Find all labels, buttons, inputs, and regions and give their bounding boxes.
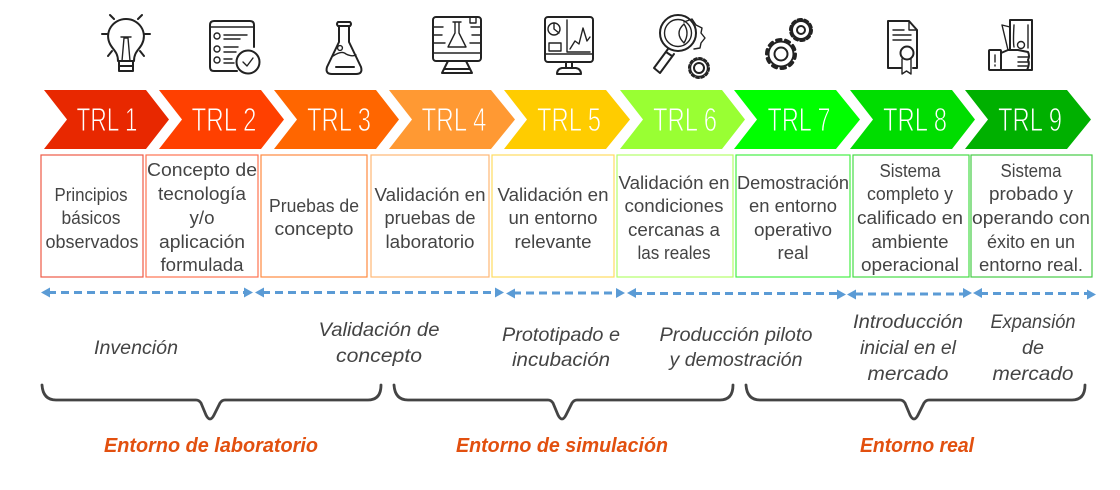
box: TRL 4 description: pruebas de (384, 208, 476, 228)
icon: gears (766, 20, 812, 68)
stage label: Introducción inicial en el mercado (853, 311, 963, 385)
box: TRL 8 description: completo y (867, 184, 953, 204)
chevron: TRL 6 (620, 90, 745, 149)
box: TRL 2 description: tecnología (158, 184, 247, 204)
icon: hand with money (989, 20, 1032, 70)
chevron: TRL 9: TRL 9 (998, 101, 1062, 138)
icon: lab monitor (433, 17, 481, 73)
chevron: TRL 7: TRL 7 (768, 101, 830, 138)
chevron: TRL 6: TRL 6 (653, 101, 717, 138)
arrow: Producción piloto range (627, 288, 846, 300)
box: TRL 8 description: Sistema (880, 161, 941, 181)
box: TRL 1 description: Principios (54, 185, 128, 205)
box: TRL 7 description: real (778, 243, 808, 263)
box: TRL 8 description: ambiente (872, 232, 948, 252)
box: TRL 6 description (617, 155, 733, 277)
box: TRL 7 description: operativo (754, 220, 832, 240)
chevron: TRL 2 (159, 90, 284, 149)
box: TRL 3 description: concepto (274, 219, 354, 239)
stage label: Expansión de mercado: de (1022, 337, 1044, 359)
box: TRL 5 description (492, 155, 614, 277)
stage label: Validación de concepto (318, 319, 440, 367)
icon: flask (327, 22, 361, 74)
stage label: Introducción inicial en el mercado: inicial en el (860, 337, 957, 359)
arrow: Introducción range (847, 288, 972, 300)
box: TRL 1 description: observados (46, 232, 138, 252)
stage label: Producción piloto y demostración (660, 324, 813, 371)
stage label: Prototipado e incubación: Prototipado e (502, 324, 620, 346)
stage label: Introducción inicial en el mercado: Introducción (853, 311, 963, 333)
stage label: Prototipado e incubación (502, 324, 620, 371)
arrow: Invención range (41, 288, 253, 298)
box: TRL 9 description: probado y (989, 184, 1073, 204)
stage label: Prototipado e incubación: incubación (512, 349, 610, 371)
box: TRL 7 description: en entorno (749, 196, 837, 216)
box: TRL 4 description: Validación en (374, 185, 486, 205)
box: TRL 9 description: entorno real. (979, 255, 1083, 275)
box: TRL 6 description: las reales (638, 243, 710, 263)
bracket: laboratorio (42, 385, 381, 419)
chevron: TRL 5 (504, 90, 630, 149)
chevron: TRL 8: TRL 8 (883, 101, 947, 138)
stage label: Producción piloto y demostración: y demostración (667, 349, 802, 371)
stage label: Expansión de mercado: mercado (992, 363, 1074, 385)
box: TRL 9 description (971, 155, 1092, 277)
box: TRL 2 description (146, 155, 258, 277)
stage label: Introducción inicial en el mercado: mercado (868, 363, 949, 385)
box: TRL 7 description (736, 155, 850, 277)
box: TRL 2 description: formulada (160, 255, 245, 275)
chevron: TRL 7 (734, 90, 860, 149)
icon: light bulb (102, 15, 150, 71)
box: TRL 5 description: relevante (514, 232, 592, 252)
box: TRL 9 description: operando con (972, 208, 1090, 228)
arrow: Prototipado range (506, 288, 625, 298)
box: TRL 5 description: un entorno (508, 208, 598, 228)
chevron: TRL 1 (44, 90, 169, 149)
icon: certificate (888, 21, 917, 74)
box: TRL 9 description: Sistema (1000, 161, 1062, 181)
box: TRL 6 description: Validación en (618, 173, 730, 193)
chevron: TRL 5: TRL 5 (537, 101, 601, 138)
box: TRL 2 description: aplicación (159, 232, 245, 252)
bracket: simulación (394, 385, 733, 419)
chevron: TRL 4: TRL 4 (422, 101, 486, 138)
box: TRL 9 description: éxito en un (987, 232, 1075, 252)
stage label: Expansión de mercado: Expansión (990, 311, 1076, 333)
icon: dashboard monitor (545, 17, 593, 74)
icon: checklist (210, 21, 260, 74)
heading: Entorno real: Entorno real (860, 435, 974, 457)
stage label: Expansión de mercado (990, 311, 1076, 385)
chevron: TRL 1: TRL 1 (76, 101, 138, 138)
stage label: Producción piloto y demostración: Producción piloto (660, 324, 813, 346)
box: TRL 4 description (371, 155, 489, 277)
icon: magnifier with gears (654, 15, 709, 78)
arrow: Validación de concepto range (255, 288, 504, 298)
box: TRL 2 description: y/o (190, 208, 214, 228)
box: TRL 2 description: Concepto de (147, 160, 257, 180)
box: TRL 8 description (853, 155, 969, 277)
chevron: TRL 8 (850, 90, 975, 149)
box: TRL 1 description: básicos (62, 208, 120, 228)
heading: Entorno de laboratorio: Entorno de laboratorio (104, 435, 318, 457)
box: TRL 3 description (261, 155, 367, 277)
arrow: Expansión range (973, 288, 1096, 300)
box: TRL 8 description: calificado en (857, 208, 963, 228)
box: TRL 8 description: operacional (861, 255, 959, 275)
chevron: TRL 4 (389, 90, 515, 149)
stage label: Validación de concepto: concepto (336, 345, 422, 367)
chevron: TRL 3 (274, 90, 399, 149)
box: TRL 1 description (41, 155, 143, 277)
stage label: Invención: Invención (94, 337, 178, 359)
box: TRL 7 description: Demostración (737, 173, 849, 193)
box: TRL 6 description: cercanas a (628, 220, 721, 240)
box: TRL 6 description: condiciones (624, 196, 724, 216)
chevron: TRL 9 (965, 90, 1091, 149)
chevron: TRL 2: TRL 2 (192, 101, 256, 138)
box: TRL 3 description: Pruebas de (269, 196, 359, 216)
heading: Entorno de simulación: Entorno de simulación (456, 435, 668, 457)
chevron: TRL 3: TRL 3 (307, 101, 371, 138)
bracket: real (746, 385, 1085, 419)
box: TRL 4 description: laboratorio (386, 232, 474, 252)
stage label: Validación de concepto: Validación de (318, 319, 440, 341)
box: TRL 5 description: Validación en (498, 185, 608, 205)
